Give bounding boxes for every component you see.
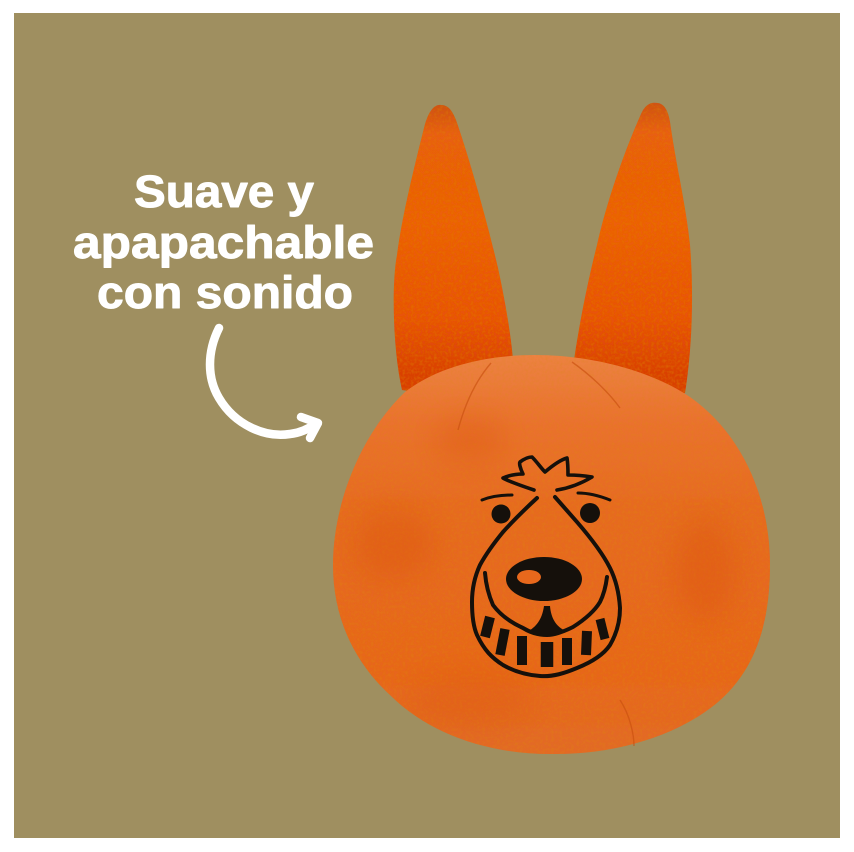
nose: [506, 557, 582, 635]
right brow: [578, 493, 610, 500]
ball body: [333, 355, 770, 754]
heading: Suave y apapachable con sonido: con sonido: [97, 267, 353, 318]
plush toy: [333, 103, 770, 754]
heading: Suave y apapachable con sonido: Suave y: [134, 166, 314, 217]
face outline: [472, 497, 620, 676]
embroidered face: [472, 457, 620, 676]
left ear: [394, 105, 513, 400]
hair tuft: [503, 457, 592, 490]
teeth: [485, 617, 605, 667]
heading: Suave y apapachable con sonido: [73, 166, 374, 318]
right ear: [574, 103, 692, 400]
ball seams: [458, 362, 634, 746]
eyes: [492, 503, 600, 524]
smile: [485, 573, 607, 635]
ball shading: [361, 426, 730, 610]
left brow: [482, 495, 512, 500]
heading: Suave y apapachable con sonido: apapachable: [73, 217, 374, 268]
arrow pointing to toy: [210, 328, 318, 438]
